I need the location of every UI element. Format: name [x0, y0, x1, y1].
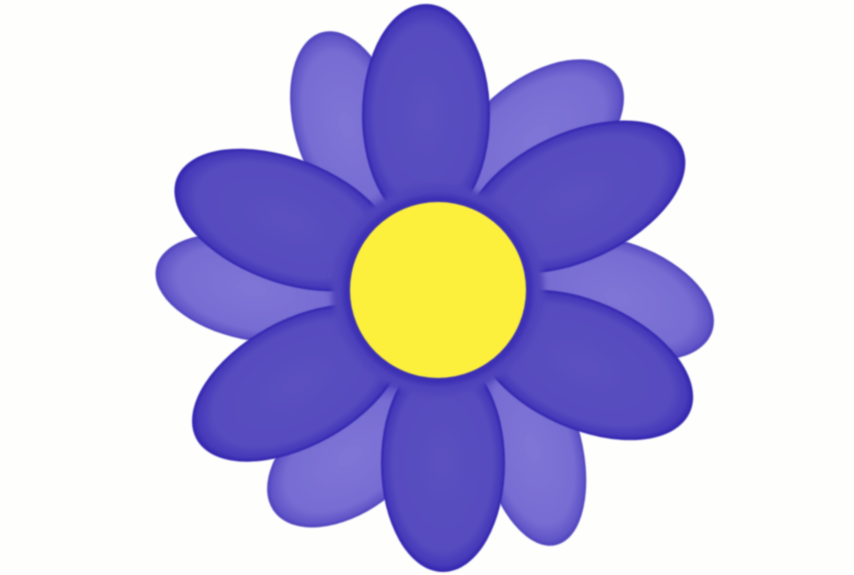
flower centre [350, 202, 526, 378]
flower centre ring [343, 195, 533, 385]
flower underlay [326, 178, 550, 402]
flower hub [332, 184, 544, 396]
front petals [154, 4, 716, 572]
back petals [145, 19, 731, 557]
